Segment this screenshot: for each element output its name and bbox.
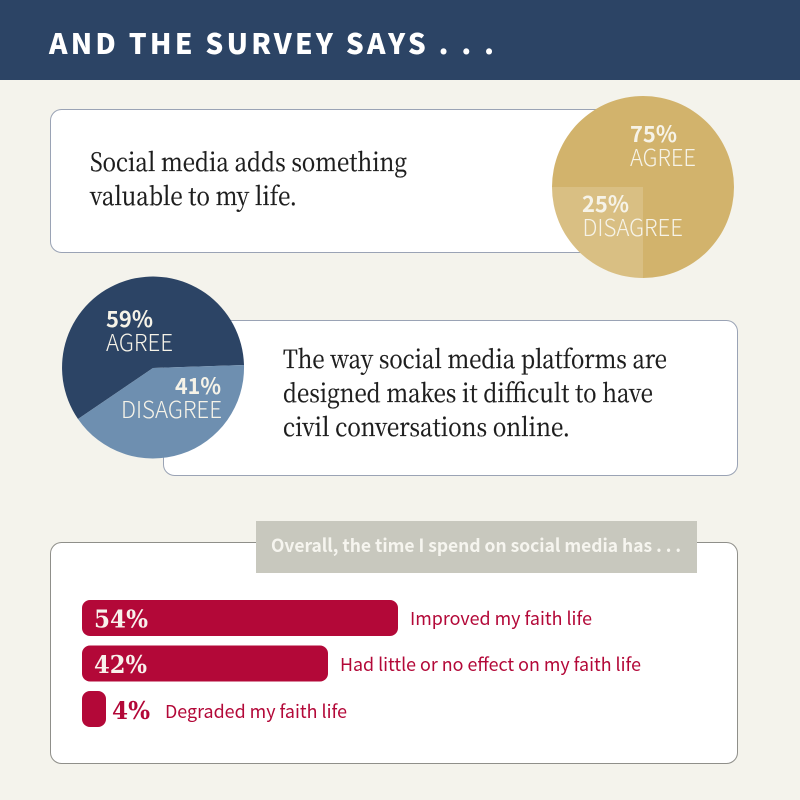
label: 59% agree: 59% [106,302,153,334]
panel: social media adds value [50,110,670,252]
label: 41% disagree: 41% [175,369,221,401]
label: 75% agree [630,117,696,173]
panel: platform design [164,320,738,476]
statement two: designed makes it difficult to have [283,374,653,410]
bar: 42% no effect [82,646,641,682]
bar: 54% improved: Improved my faith life [410,605,592,631]
statement two: The way social media platforms are [283,340,667,376]
pie chart: 59 agree, 41 disagree [62,277,244,459]
title banner [0,0,800,80]
statement one: Social media adds something [90,143,407,179]
bar: 42% no effect: Had little or no effect on my faith life [340,651,641,677]
label: 25% disagree: DISAGREE [582,209,683,243]
question heading: Overall, the time I spend on social media has . . . [271,532,681,558]
panel: time on social media [50,521,738,764]
statement two [283,340,667,444]
bar: 4% degraded [82,691,347,727]
label: 75% agree: 75% [630,117,677,149]
label: 25% disagree [582,187,683,243]
label: 41% disagree: DISAGREE [121,391,222,425]
question heading [256,521,697,573]
bar: 4% degraded: 4% [112,696,150,725]
statement one [89,143,407,213]
bar: 54% improved: 54% [94,604,148,634]
statement one: valuable to my life. [89,177,297,213]
statement two: civil conversations online. [283,408,570,444]
pie chart: 75 agree, 25 disagree [552,96,734,278]
label: 41% disagree [121,369,222,425]
bar: 42% no effect: 42% [94,650,147,679]
label: 25% disagree: 25% [582,187,629,219]
label: 59% agree: AGREE [106,324,173,358]
bar: 4% degraded: Degraded my faith life [165,698,347,724]
title: AND THE SURVEY SAYS . . . [48,23,494,63]
label: 75% agree: AGREE [630,139,696,173]
bar: 54% improved [82,600,592,636]
label: 59% agree [106,302,173,358]
